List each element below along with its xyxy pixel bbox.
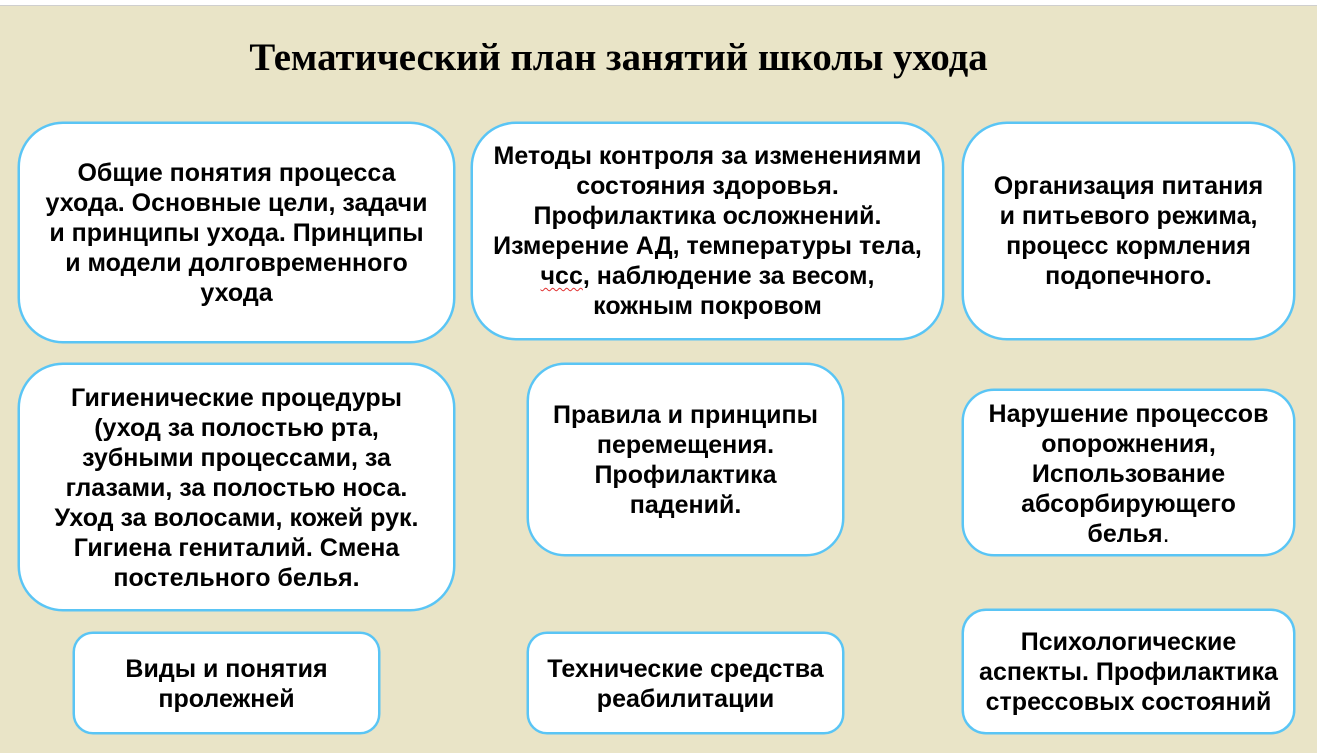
- panel: elimination disorders: опорожнения,: [1041, 430, 1216, 458]
- panel: pressure sores: [73, 632, 380, 734]
- panel: nutrition organisation: [962, 122, 1295, 340]
- panel: hygiene procedures: постельного белья.: [113, 564, 360, 592]
- panel: hygiene procedures: Гигиена гениталий. Смена: [74, 534, 399, 562]
- panel: general concepts of care: ухода: [200, 279, 273, 307]
- panel: health monitoring methods: кожным покровом: [593, 292, 822, 320]
- panel: moving rules: [527, 363, 844, 556]
- panel: health monitoring methods: состояния здоровья.: [576, 172, 839, 200]
- panel: psychological aspects: [962, 609, 1295, 734]
- panel: general concepts of care: и принципы ухода. Принципы: [49, 219, 424, 247]
- panel: technical aids: Технические средства: [547, 655, 824, 683]
- panel: psychological aspects: Психологические: [1021, 628, 1236, 656]
- panel: health monitoring methods: Методы контроля за изменениями: [494, 142, 922, 170]
- panel: elimination disorders: Нарушение процессов: [989, 400, 1268, 428]
- panel: health monitoring methods: чсс, наблюдение за весом,: [541, 262, 874, 290]
- panel: psychological aspects: аспекты. Профилактика: [979, 658, 1278, 686]
- panel: nutrition organisation: подопечного.: [1045, 262, 1212, 290]
- panel: elimination disorders: [962, 389, 1295, 556]
- panel: elimination disorders: Использование: [1032, 460, 1225, 488]
- panel: hygiene procedures: Уход за волосами, кожей рук.: [54, 504, 418, 532]
- panel: hygiene procedures: глазами, за полостью носа.: [66, 474, 407, 502]
- panel: hygiene procedures: (уход за полостью рта,: [94, 414, 379, 442]
- panel: hygiene procedures: Гигиенические процедуры: [71, 384, 402, 412]
- panel: general concepts of care: ухода. Основные цели, задачи: [46, 189, 427, 217]
- panel: general concepts of care: Общие понятия процесса: [77, 159, 396, 187]
- panel: elimination disorders: белья.: [1087, 520, 1170, 548]
- panel: moving rules: падений.: [630, 491, 741, 519]
- title: Тематический план занятий школы ухода: [249, 36, 988, 79]
- panel: psychological aspects: стрессовых состояний: [986, 688, 1271, 716]
- panel: technical aids: [527, 632, 844, 734]
- panel: hygiene procedures: [18, 363, 455, 611]
- panel: nutrition organisation: Организация питания: [994, 172, 1263, 200]
- panel: pressure sores: Виды и понятия: [125, 655, 328, 683]
- panel: health monitoring methods: Профилактика осложнений.: [534, 202, 881, 230]
- panel: pressure sores: пролежней: [158, 685, 295, 713]
- panel: moving rules: Профилактика: [594, 461, 777, 489]
- panel: nutrition organisation: процесс кормления: [1006, 232, 1251, 260]
- panel: health monitoring methods: [471, 122, 944, 340]
- panel: elimination disorders: абсорбирующего: [1021, 490, 1236, 518]
- panel: general concepts of care: [18, 122, 455, 343]
- panel: hygiene procedures: зубными процессами, за: [82, 444, 391, 472]
- panel: health monitoring methods: Измерение АД, температуры тела,: [493, 232, 922, 260]
- panel: general concepts of care: и модели долговременного: [65, 249, 408, 277]
- panel: technical aids: реабилитации: [597, 685, 774, 713]
- panel: moving rules: Правила и принципы: [553, 401, 818, 429]
- panel: moving rules: перемещения.: [597, 431, 774, 459]
- panel: nutrition organisation: и питьевого режима,: [1000, 202, 1257, 230]
